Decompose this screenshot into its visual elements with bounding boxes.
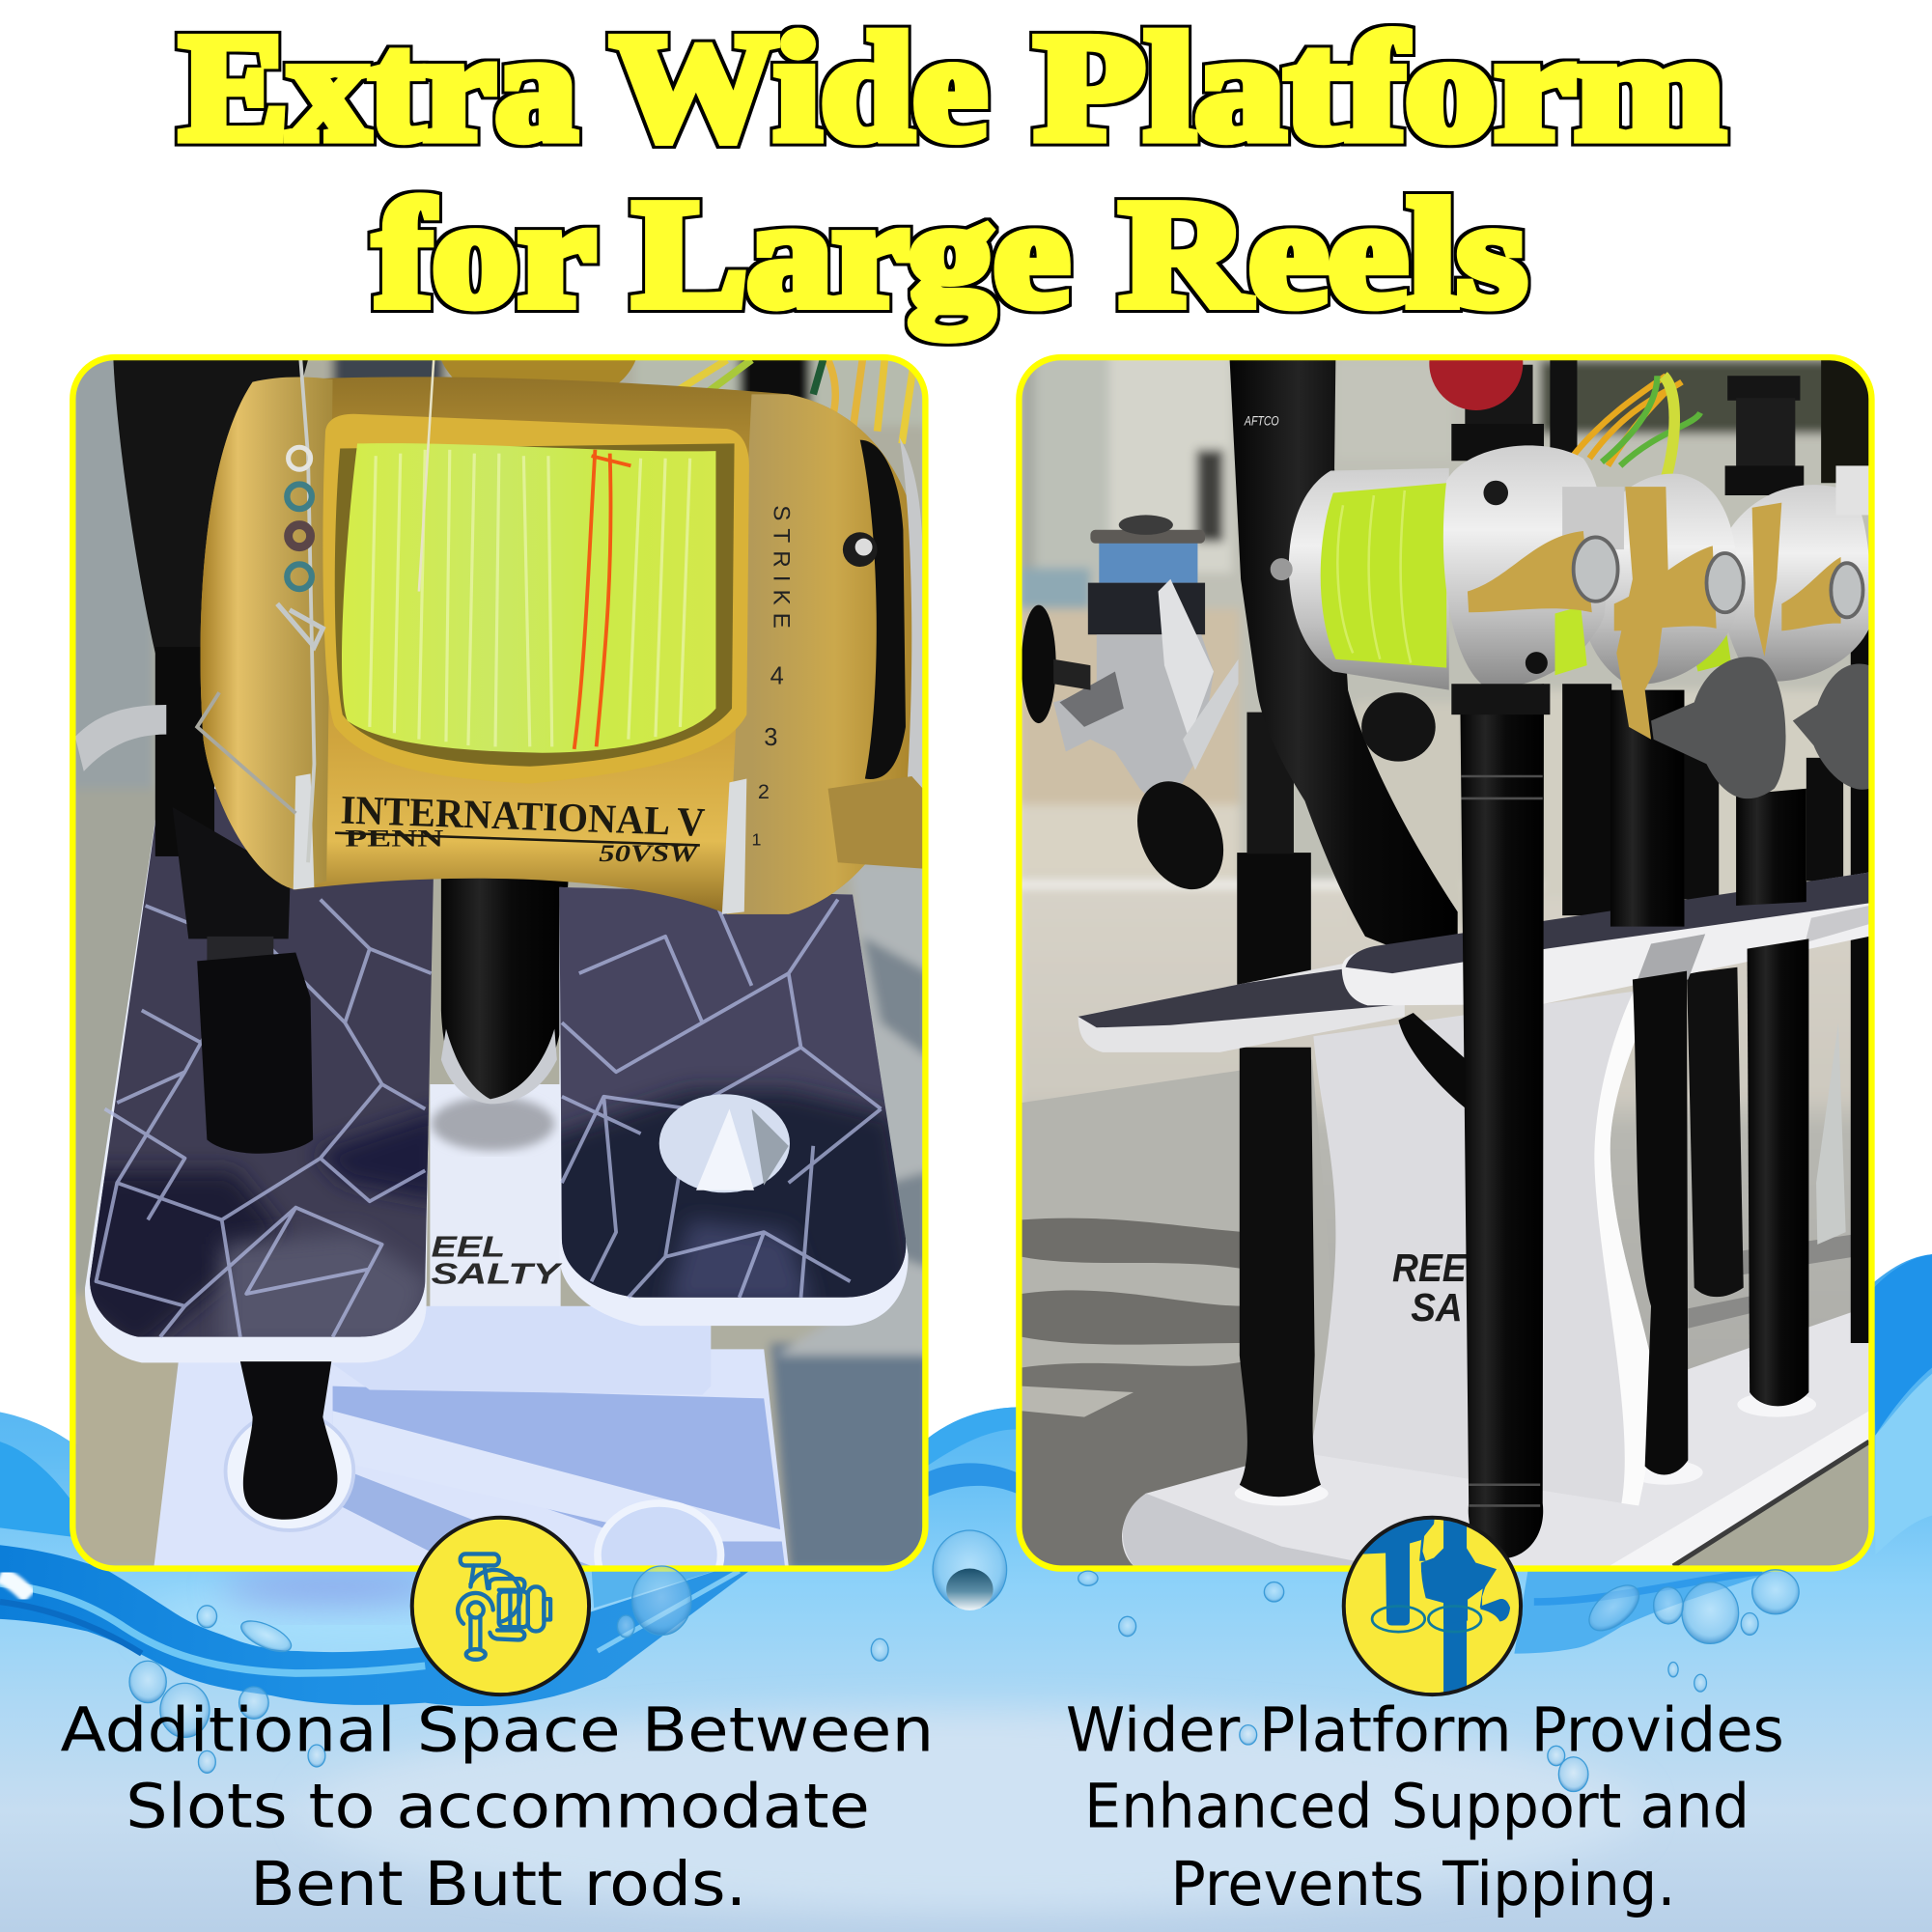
panel: photo of gold reel over extra wide platform [68,351,930,1607]
silver bar left [75,705,166,771]
text block: wider platform provides support: Enhanced Support and [1084,1771,1750,1842]
reel text: International V: INTERNATIONAL V [340,787,706,846]
reel text: STRIKE scale [753,506,790,846]
title: for [375,170,595,339]
background: water waves [0,1254,1932,1932]
title: Platform [1035,4,1725,173]
red marker line [574,450,630,749]
gold reel [201,377,923,914]
left panel yellow border [72,357,925,1569]
stand logo: REE [1392,1246,1468,1290]
right knob ring [860,440,906,779]
coloured line tassel [1571,376,1700,478]
reel text: STRIKE scale: 1 [751,829,761,849]
panel: photo of rods in rack side view [1017,317,1879,1577]
left rod and handle [113,360,313,1154]
brass cup top [441,360,635,382]
centre black rod [441,862,570,1104]
black foot of first reel [1451,684,1550,714]
title: Large [633,170,1070,339]
spool strip between reels [1554,606,1587,675]
platform pad left [74,771,443,1362]
right rods lower [1610,690,1808,1475]
colourful line top right [672,360,914,443]
reel text: International V: 50VSW [599,839,700,867]
gold lever arms [1468,487,1841,740]
icon: pump reel badge [412,1518,589,1694]
text block: additional space between slots [61,1694,934,1919]
hourglass white stand [1310,988,1659,1505]
title [180,4,1725,339]
photo background pavement [68,351,930,1571]
text block: wider platform provides support: Prevents Tipping. [1170,1848,1676,1919]
second silver reel [1581,474,1739,685]
white base of rack [154,1349,789,1566]
fluorescent line [342,443,715,753]
swivel and leader wire [197,360,434,862]
icon: rods in slots badge [1342,1509,1521,1699]
front rod [1460,684,1544,1558]
reel text: International V [342,797,705,861]
text block: additional space between slots: Additional Space Between [61,1694,934,1765]
logo on rack [432,1236,562,1284]
lever and screw [828,776,923,869]
bent butt rod [1230,360,1458,973]
reel text: STRIKE scale: 3 [764,724,777,751]
left foam rod [1237,713,1321,1497]
text block: wider platform provides support [1066,1694,1784,1919]
text block: wider platform provides support: Wider Platform Provides [1066,1694,1784,1765]
lower black rod butt [240,1361,337,1520]
logo on rack: SALTY [432,1258,563,1291]
platform pad right [543,887,924,1326]
reel text: STRIKE scale: 4 [770,662,784,689]
grey knobs [1651,657,1869,798]
spinning reel [1022,515,1240,904]
centre support column and block [366,1084,711,1392]
spool window [322,414,749,784]
rod head thread [1429,317,1870,495]
title: Wide [611,4,987,173]
text block: additional space between slots: Bent Butt rods. [250,1848,746,1919]
logo on rack: EEL [432,1231,505,1264]
silver clamps [294,773,314,889]
reel text: STRIKE scale: STRIKE [768,505,794,629]
black knob behind [1361,692,1436,762]
white rack base [1122,1232,1869,1571]
bolts on levers [1574,537,1863,617]
third silver reel [1688,465,1873,682]
back rods [1562,616,1869,1343]
right panel yellow border [1019,357,1871,1569]
title: Extra [180,4,576,173]
AFTCO rod label: AFTCO [1244,412,1279,428]
reel text: International V: PENN [345,825,444,853]
stand logo: SA [1411,1285,1463,1330]
reel text: STRIKE scale: 2 [758,779,770,803]
shadows on concrete [1022,1218,1245,1269]
text block: additional space between slots: Slots to accommodate [126,1771,870,1842]
stand logo [1392,1246,1468,1330]
photo background [1017,351,1879,1577]
platform tiers [1078,873,1869,1052]
water droplets [129,1530,1799,1792]
title: Reels [1120,170,1526,339]
main silver reel with green spool [1271,445,1624,690]
